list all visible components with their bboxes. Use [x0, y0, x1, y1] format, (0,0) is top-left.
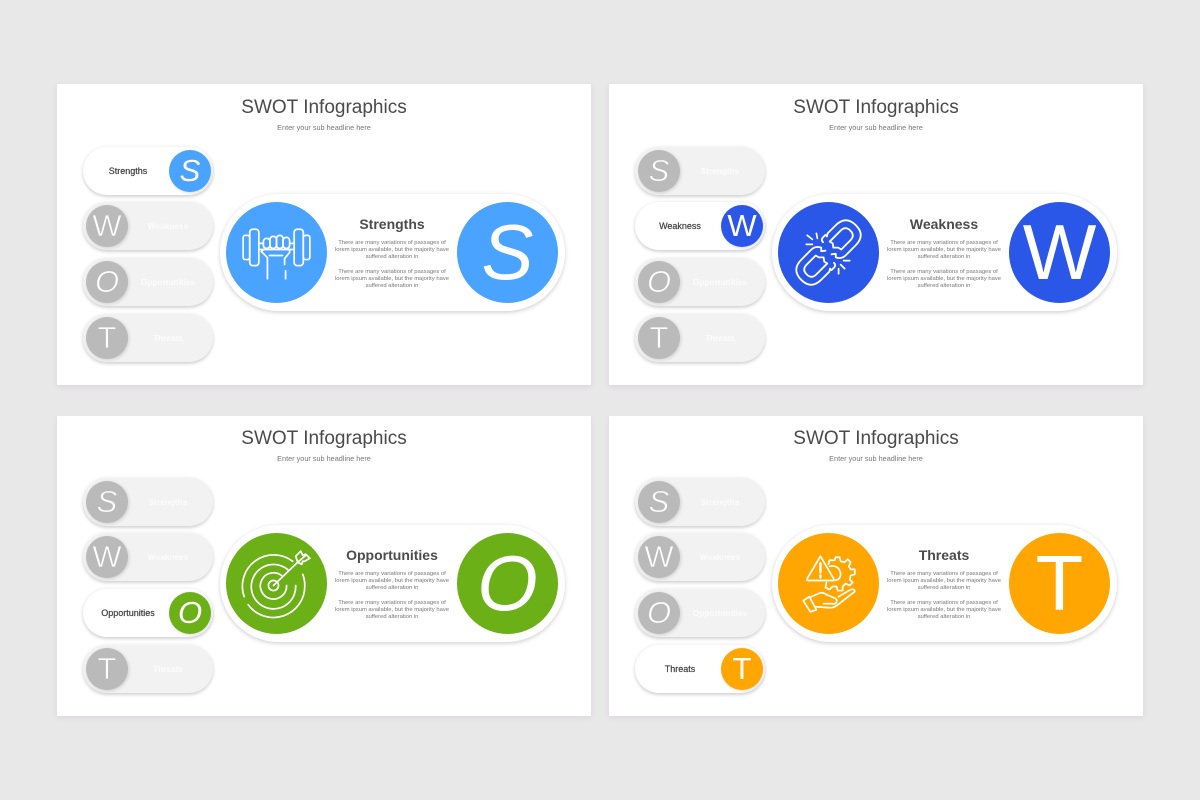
feature card: strengths [220, 194, 565, 311]
heading: Opportunities [346, 547, 438, 563]
paragraph 1: lorem ipsum available, but the majority have [887, 578, 1001, 584]
paragraph 2 [887, 600, 1001, 618]
paragraph 2: lorem ipsum available, but the majority have [335, 276, 449, 282]
pill: weakness: W [644, 539, 674, 574]
paragraph 2: suffered alteration in [918, 614, 970, 620]
pill: weakness: W [92, 208, 122, 243]
pill: strengths active: Strengths [109, 166, 147, 176]
panel: strengths [57, 84, 591, 385]
paragraph 2: lorem ipsum available, but the majority have [887, 276, 1001, 282]
big letter O: O [477, 539, 538, 627]
big letter W: W [1023, 208, 1096, 296]
pill: opportunities: O [647, 595, 671, 630]
pill: strengths active [83, 147, 213, 195]
pill: strengths [635, 478, 765, 526]
pill: threats active [635, 645, 765, 693]
title: SWOT Infographics [241, 428, 407, 449]
paragraph 1 [335, 571, 449, 589]
subtitle: Enter your sub headline here [277, 454, 371, 463]
paragraph 1: There are many variations of passages of [338, 240, 446, 246]
pill: threats: Threats [153, 333, 183, 343]
paragraph 1: lorem ipsum available, but the majority have [887, 247, 1001, 253]
pill: strengths active: S [180, 153, 200, 188]
paragraph 1: There are many variations of passages of [338, 570, 446, 576]
pill: strengths [83, 478, 213, 526]
paragraph 2: suffered alteration in [366, 614, 418, 620]
paragraph 2: There are many variations of passages of [338, 600, 446, 606]
pill: opportunities: O [95, 264, 119, 299]
pill: weakness: Weakness [700, 552, 740, 562]
panel: opportunities [57, 415, 591, 716]
pill: weakness [635, 533, 765, 581]
pill: threats: T [98, 651, 116, 686]
paragraph 1: suffered alteration in [918, 585, 970, 591]
panel: threats [609, 415, 1143, 716]
pill: strengths: S [97, 484, 117, 519]
paragraph 2: There are many variations of passages of [338, 268, 446, 274]
pill: weakness [83, 533, 213, 581]
pill: opportunities active: Opportunities [101, 608, 155, 618]
pill: weakness active [635, 202, 765, 250]
pill: weakness: Weakness [148, 552, 188, 562]
paragraph 2 [335, 268, 449, 289]
icon: target with arrow [226, 533, 327, 634]
pill: opportunities: Opportunities [141, 277, 195, 287]
big letter O [457, 533, 558, 634]
text block [335, 216, 449, 289]
paragraph 1: There are many variations of passages of [890, 240, 998, 246]
subtitle: Enter your sub headline here [829, 123, 923, 132]
icon: hand holding warning and gear [778, 533, 879, 634]
paragraph 1: There are many variations of passages of [890, 570, 998, 576]
feature card: weakness [772, 194, 1117, 311]
pill: opportunities: O [647, 264, 671, 299]
pill: opportunities [635, 258, 765, 306]
pill: weakness active: Weakness [659, 221, 701, 231]
paragraph 2: lorem ipsum available, but the majority have [887, 607, 1001, 613]
pill: opportunities: Opportunities [693, 277, 747, 287]
text block [887, 550, 1001, 618]
pill: weakness: W [92, 539, 122, 574]
big letter S [457, 202, 558, 303]
pill: threats active: Threats [665, 664, 695, 674]
pill: strengths: S [649, 484, 669, 519]
paragraph 2 [887, 268, 1001, 289]
paragraph 1: suffered alteration in [918, 254, 970, 260]
paragraph 2: There are many variations of passages of [890, 600, 998, 606]
pill: threats [635, 314, 765, 362]
subtitle: Enter your sub headline here [829, 454, 923, 463]
paragraph 2: lorem ipsum available, but the majority have [335, 607, 449, 613]
pill: strengths: S [649, 153, 669, 188]
paragraph 2: suffered alteration in [366, 283, 418, 289]
paragraph 1: suffered alteration in [366, 254, 418, 260]
heading: Weakness [910, 216, 978, 232]
feature card: threats [772, 525, 1117, 642]
text block [887, 216, 1001, 289]
pill: threats: Threats [153, 664, 183, 674]
paragraph 2: There are many variations of passages of [890, 268, 998, 274]
heading: Threats [919, 547, 969, 563]
big letter S: S [481, 208, 534, 296]
paragraph 1 [887, 571, 1001, 589]
pill: threats [83, 314, 213, 362]
paragraph 2 [335, 600, 449, 618]
big letter T: T [1036, 539, 1083, 627]
feature card: opportunities [220, 525, 565, 642]
pill: weakness active: W [727, 208, 757, 243]
paragraph 1: lorem ipsum available, but the majority have [335, 578, 449, 584]
icon: broken chain [778, 202, 879, 303]
heading: Strengths [359, 216, 425, 232]
pill: threats: T [650, 320, 668, 355]
pill: opportunities: Opportunities [693, 608, 747, 618]
pill: strengths: Strengths [701, 166, 739, 176]
title: SWOT Infographics [241, 97, 407, 118]
pill: opportunities [635, 589, 765, 637]
pill: opportunities active [83, 589, 213, 637]
title: SWOT Infographics [793, 428, 959, 449]
pill: weakness [83, 202, 213, 250]
pill: threats: T [98, 320, 116, 355]
pill: strengths [635, 147, 765, 195]
paragraph 2: suffered alteration in [918, 283, 970, 289]
pill: strengths: Strengths [149, 497, 187, 507]
paragraph 1: suffered alteration in [366, 585, 418, 591]
pill: opportunities active: O [178, 595, 202, 630]
subtitle: Enter your sub headline here [277, 123, 371, 132]
paragraph 1 [335, 240, 449, 260]
paragraph 1: lorem ipsum available, but the majority have [335, 247, 449, 253]
icon: fist lifting dumbbell [226, 202, 327, 303]
pill: threats: Threats [705, 333, 735, 343]
pill: strengths: Strengths [701, 497, 739, 507]
big letter W [1009, 202, 1110, 303]
pill: weakness: Weakness [148, 221, 188, 231]
pill: threats active: T [733, 651, 751, 686]
pill: opportunities [83, 258, 213, 306]
panel: weakness [609, 84, 1143, 385]
text block [335, 550, 449, 618]
big letter T [1009, 533, 1110, 634]
paragraph 1 [887, 240, 1001, 260]
title: SWOT Infographics [793, 97, 959, 118]
pill: threats [83, 645, 213, 693]
